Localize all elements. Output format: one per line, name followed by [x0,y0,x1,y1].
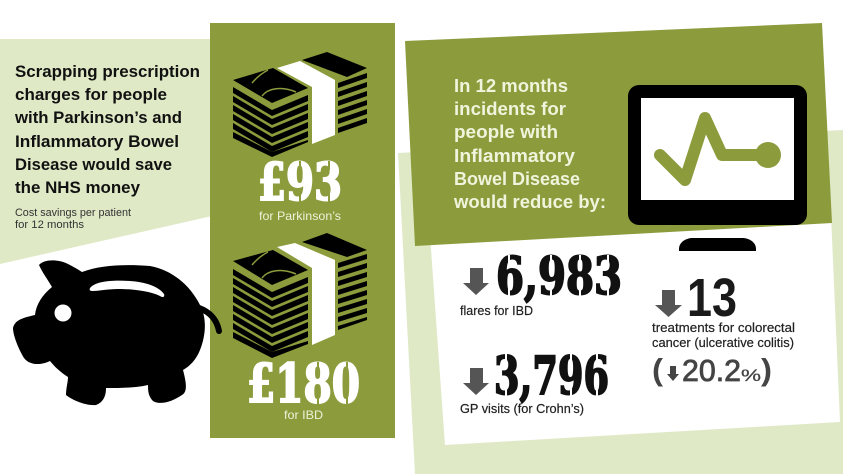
heading: scrapping prescription charges: the NHS money [15,178,141,197]
label: for Parkinson's: for Parkinson’s [259,209,341,223]
stat: 20.2 percent [652,352,772,388]
heading: in 12 months incidents [453,76,606,212]
stat: 20.2 percent: ) [761,352,772,387]
caption: cost savings: for 12 months [15,219,85,231]
white results panel [430,215,840,445]
heading: in 12 months incidents: people with [454,122,558,142]
stat: colorectal treatments: 13 [687,268,737,328]
heading: in 12 months incidents: Bowel Disease [454,169,580,189]
caption: cost savings: Cost savings per patient [15,207,131,219]
heading: scrapping prescription charges [14,62,200,197]
left pale green banner [0,39,212,264]
stat: GP visits [460,346,609,416]
icon: money stack small [233,52,367,157]
stat: colorectal treatments: treatments for colorectal [652,321,795,335]
icon: piggy bank [13,260,219,405]
stat: 20.2 percent: % [741,366,761,385]
label: for IBD: for IBD [284,408,323,422]
heading: scrapping prescription charges: with Parkinson’s and [14,108,182,127]
icon: monitor with pulse line [628,85,807,251]
heading: scrapping prescription charges: charges for people [15,85,167,104]
heading: scrapping prescription charges: Disease would save [15,155,172,174]
stat: flares: 6,983 [496,247,622,307]
stat: flares: flares for IBD [460,304,533,318]
stat: colorectal treatments: cancer (ulcerative colitis) [652,336,794,350]
stat: 20.2 percent: 20.2 [682,353,741,388]
stat: £180: £180 [247,353,360,415]
heading: in 12 months incidents: incidents for [454,99,566,119]
heading: in 12 months incidents: Inflammatory [454,146,575,166]
right pale green background [398,130,843,474]
panel: savings per patient [210,23,395,438]
stat: flares [460,247,622,318]
icon: money stack large [233,233,367,358]
heading: in 12 months incidents: would reduce by: [453,192,606,212]
stat: GP visits: GP visits (for Crohn’s) [460,402,584,416]
stat: colorectal treatments [652,268,795,350]
stat: GP visits: 3,796 [494,346,609,407]
stat: 20.2 percent: ( [652,352,664,387]
panel: incidents heading [405,23,832,246]
stat: £93: £93 [258,153,342,213]
heading: scrapping prescription charges: Inflammatory Bowel [15,132,179,151]
caption: cost savings [15,207,131,231]
heading: scrapping prescription charges: Scrapping prescription [15,62,200,81]
heading: in 12 months incidents: In 12 months [454,76,568,96]
